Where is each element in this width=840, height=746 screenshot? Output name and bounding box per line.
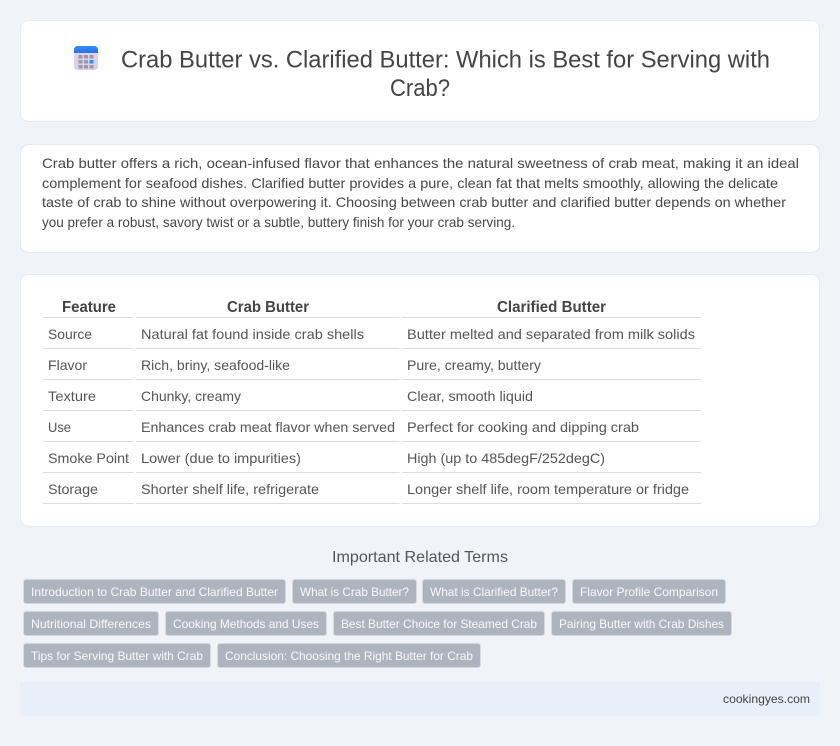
row: use	[48, 419, 639, 435]
row: use: Perfect for cooking and dipping crab	[407, 419, 639, 435]
row: storage: Storage	[48, 481, 98, 497]
related terms heading: Important Related Terms	[332, 549, 508, 566]
table header	[62, 299, 606, 316]
row: texture: Chunky, creamy	[141, 388, 241, 404]
row: storage	[48, 481, 689, 497]
row: texture: Texture	[48, 388, 96, 404]
footer bar: cookingyes.com	[723, 692, 810, 706]
related term tags	[24, 580, 732, 668]
related term tags: Cooking Methods and Uses	[173, 617, 319, 631]
paragraph text	[42, 155, 799, 230]
row: source	[48, 326, 695, 342]
paragraph text: you prefer a robust, savory twist or a subtle, buttery finish for your crab serving.	[42, 214, 515, 230]
row: source: Natural fat found inside crab shells	[141, 326, 364, 342]
related term tags: Nutritional Differences	[31, 617, 151, 631]
row: use: Enhances crab meat flavor when served	[141, 419, 395, 435]
comparison table card	[20, 274, 820, 526]
row: source: Butter melted and separated from milk solids	[407, 326, 695, 342]
row: flavor: Pure, creamy, buttery	[407, 357, 541, 373]
row: smoke point	[48, 450, 605, 466]
related term tags: Tips for Serving Butter with Crab	[31, 649, 203, 663]
title: Crab Butter vs. Clarified Butter: Which is Best for Serving with	[121, 46, 770, 74]
row: smoke point: High (up to 485degF/252degC)	[407, 450, 605, 466]
row: smoke point: Smoke Point	[48, 450, 129, 466]
header card	[20, 20, 820, 122]
related term tags: What is Clarified Butter?	[430, 585, 558, 599]
row: use: Use	[48, 419, 71, 435]
row: flavor: Flavor	[48, 357, 87, 373]
related term tags: What is Crab Butter?	[300, 585, 409, 599]
related term tags: Introduction to Crab Butter and Clarified Butter	[31, 585, 278, 599]
related term tags: Conclusion: Choosing the Right Butter for Crab	[225, 649, 473, 663]
icon: calendar	[74, 46, 98, 70]
table header: Crab Butter	[227, 299, 309, 316]
row: storage: Shorter shelf life, refrigerate	[141, 481, 319, 497]
paragraph text: taste of crab to shine without overpowering it. Choosing between crab butter and clarified butter depends on whether	[42, 194, 786, 210]
row: texture	[48, 388, 533, 404]
table header: Feature	[62, 299, 116, 316]
related term tags: Best Butter Choice for Steamed Crab	[341, 617, 537, 631]
row: storage: Longer shelf life, room temperature or fridge	[407, 481, 689, 497]
row: texture: Clear, smooth liquid	[407, 388, 533, 404]
title: Crab?	[390, 75, 450, 102]
paragraph text: Crab butter offers a rich, ocean-infused flavor that enhances the natural sweetness of crab meat, making it an ideal	[42, 155, 799, 171]
row: source: Source	[48, 326, 92, 342]
row: flavor	[48, 357, 541, 373]
footer bar	[20, 682, 820, 716]
row: smoke point: Lower (due to impurities)	[141, 450, 301, 466]
paragraph text: complement for seafood dishes. Clarified butter provides a pure, clean fat that melts smoothly, allowing the delicate	[42, 175, 778, 191]
table header: Clarified Butter	[497, 299, 606, 316]
title	[121, 46, 770, 102]
related term tags: Flavor Profile Comparison	[580, 585, 718, 599]
related term tags: Pairing Butter with Crab Dishes	[559, 617, 724, 631]
intro paragraph card	[20, 144, 820, 252]
row: flavor: Rich, briny, seafood-like	[141, 357, 290, 373]
